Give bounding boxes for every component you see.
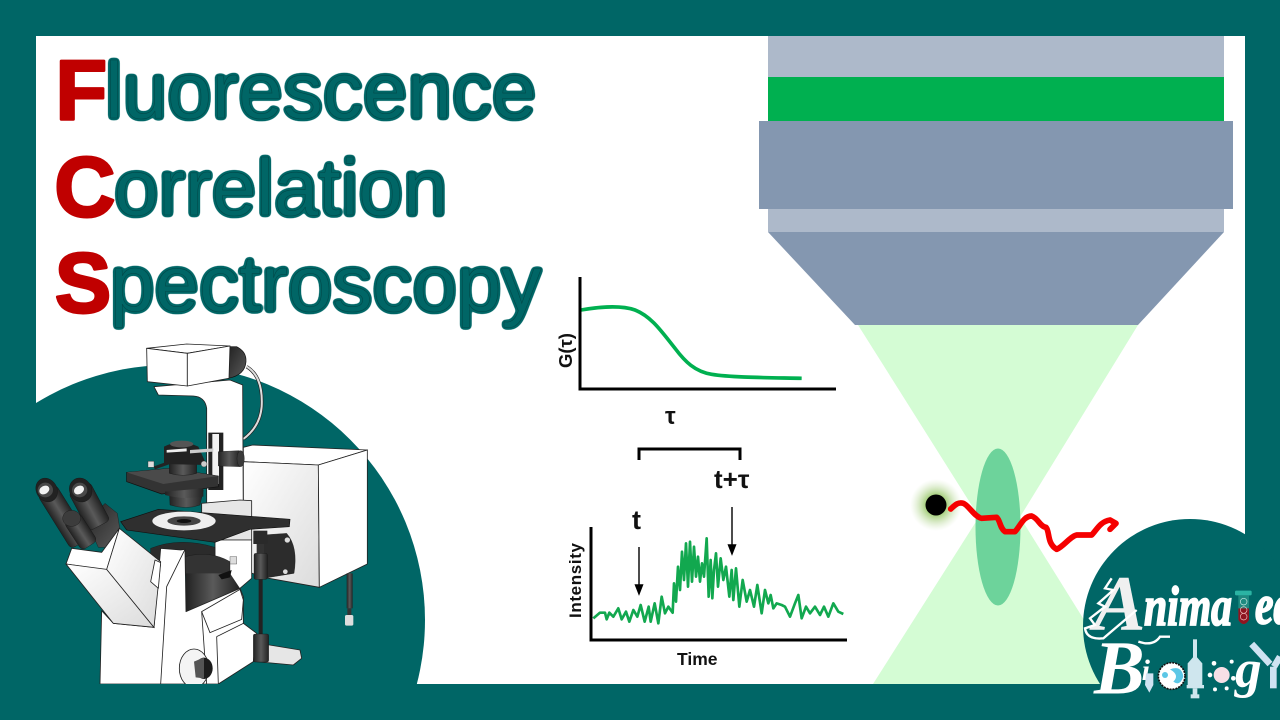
logo word nimated — [1144, 585, 1280, 626]
objective collar — [759, 121, 1233, 209]
y label Intensity: Intensity — [566, 542, 585, 618]
arrow at t — [636, 547, 642, 594]
title line: Fluorescence: luorescence — [105, 46, 536, 135]
microscope foot — [257, 644, 302, 665]
title line: Correlation: C — [54, 140, 115, 234]
logo letter A: A — [1088, 559, 1146, 646]
intensity trace chart — [566, 449, 847, 669]
focus knob — [218, 451, 244, 467]
fluorescence trace — [593, 538, 843, 623]
cable core — [243, 367, 262, 439]
lamp rod — [345, 573, 353, 626]
arrow at t+tau — [728, 507, 736, 554]
light cone — [858, 325, 1138, 684]
mechanical stage — [121, 509, 290, 542]
right stage bracket — [263, 533, 295, 578]
logo: Animated Biology — [1083, 519, 1280, 698]
logo background circle — [1083, 519, 1245, 684]
logo syringe — [1187, 639, 1204, 698]
logo word Biology: i — [1142, 654, 1151, 687]
title line: Correlation: orrelation — [114, 143, 448, 232]
objective lens — [759, 36, 1233, 325]
logo word Biology: B — [1093, 626, 1145, 710]
logo virus — [1208, 660, 1236, 691]
rail slot — [212, 434, 219, 484]
logo word nimated: nima — [1144, 575, 1232, 637]
fluorophore molecule — [910, 479, 962, 531]
title line: Spectroscopy: pectroscopy — [110, 239, 541, 328]
upper arm — [154, 380, 243, 527]
G(tau) curve — [581, 307, 802, 378]
trace axes — [591, 527, 847, 640]
pillar collar — [202, 500, 252, 540]
lower pillar backing — [215, 540, 252, 597]
logo word Biology — [1093, 643, 1260, 698]
logo antibody — [1252, 644, 1280, 688]
logo test tube — [1235, 591, 1252, 624]
molecule glow — [910, 479, 962, 531]
chart axes — [580, 277, 836, 389]
objective green band — [768, 77, 1224, 121]
condenser lower barrel — [169, 490, 203, 507]
turret — [151, 542, 240, 612]
back rail — [208, 433, 223, 490]
camera cap — [228, 347, 246, 378]
main body — [66, 528, 257, 688]
x label Time: Time — [677, 649, 718, 669]
teal circle behind microscope — [36, 366, 425, 684]
title line: Fluorescence: F — [56, 44, 107, 138]
title line: Spectroscopy: S — [55, 236, 111, 330]
objective tapered nose — [768, 232, 1224, 325]
logo word Biology: g — [1234, 639, 1262, 699]
x label: τ — [665, 403, 676, 430]
cable — [243, 367, 262, 439]
objective top band — [768, 36, 1224, 77]
eyepieces — [32, 474, 120, 551]
label t+tau: t+τ — [714, 464, 750, 494]
camera box — [147, 344, 230, 386]
title — [54, 44, 541, 330]
logo cell icon — [1158, 663, 1185, 689]
confocal volume ellipse — [976, 448, 1020, 606]
focus rod — [253, 531, 269, 662]
icon: inverted microscope — [32, 344, 367, 688]
objective lower band — [768, 209, 1224, 232]
logo dropper — [1145, 673, 1153, 693]
condenser plate — [127, 468, 218, 498]
correlation curve chart — [555, 277, 836, 430]
y label: G(τ) — [555, 333, 576, 368]
molecule dot — [926, 494, 946, 516]
tau bracket — [639, 449, 740, 460]
lamp housing box — [243, 445, 367, 587]
diffusion path arrow — [951, 503, 1116, 549]
teal frame mask below microscope — [0, 684, 1280, 720]
label t: t — [632, 505, 641, 535]
condenser head — [148, 441, 213, 475]
logo A squiggle — [1085, 578, 1170, 643]
